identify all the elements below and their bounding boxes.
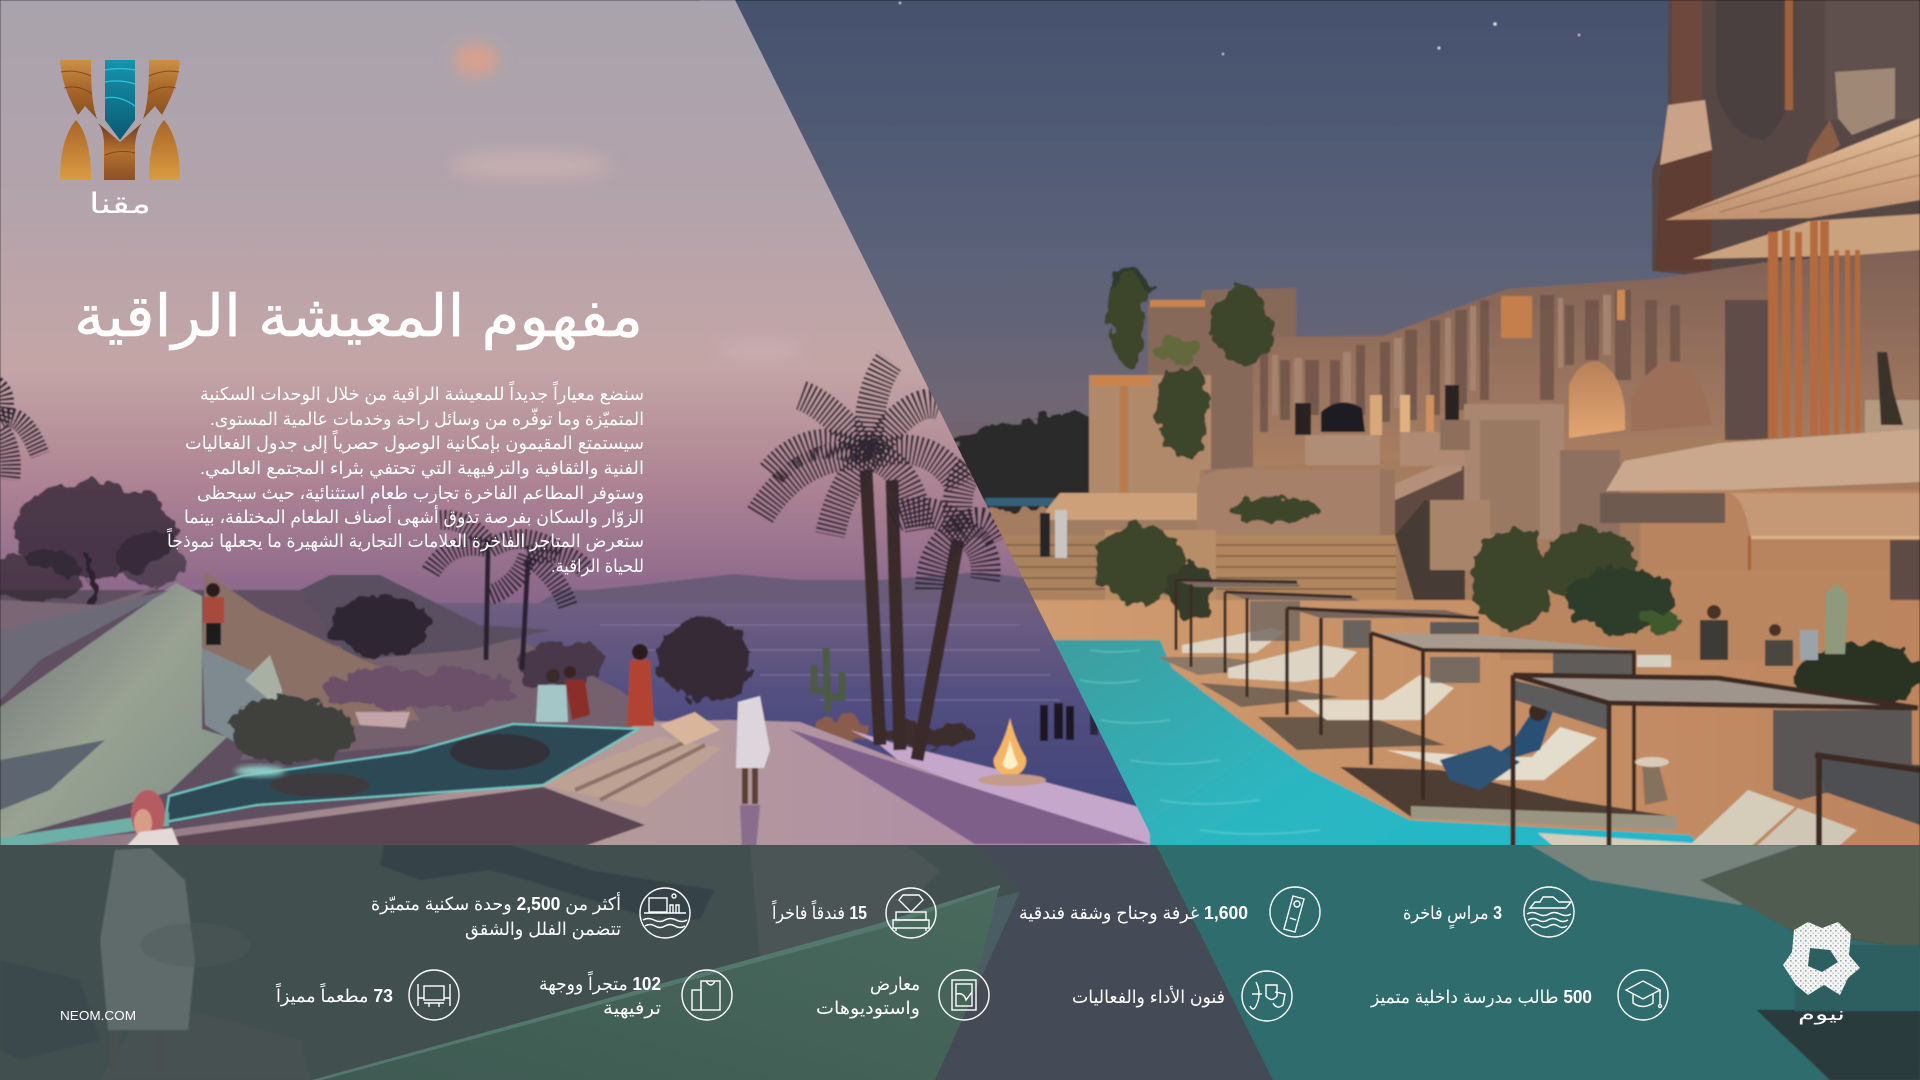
stat: marinas: 3 مراسٍ فاخرة	[1403, 903, 1502, 929]
sea	[438, 602, 1150, 834]
stat: shops: 102 متجراً ووجهة	[539, 971, 661, 995]
tree left	[0, 482, 186, 605]
stat: marinas	[1403, 887, 1574, 937]
stat: hotel rooms	[1019, 887, 1320, 937]
stat: restaurants: 73 مطعماً مميزاً	[275, 983, 393, 1007]
logo: Magna	[60, 60, 180, 219]
vines and plants	[1094, 268, 1920, 707]
body text: للحياة الراقية.	[551, 556, 644, 577]
bottom info band	[0, 845, 1920, 1080]
stat: galleries	[816, 970, 989, 1020]
icon: theatre masks	[1242, 971, 1292, 1021]
bathrobe figure	[736, 696, 770, 850]
icon: bed with diamond	[886, 888, 936, 938]
cactus	[814, 648, 842, 712]
seated women	[536, 666, 590, 722]
cabana 5	[1512, 675, 1920, 1060]
walking couple	[1040, 510, 1067, 558]
icon: shopping bags	[682, 970, 732, 1020]
neom mark	[1783, 922, 1860, 995]
stat: residential units: أكثر من 2,500 وحدة سكنية متميّزة	[371, 892, 621, 915]
stat: hotel rooms: 1,600 غرفة وجناح وشقة فندقية	[1019, 903, 1248, 924]
long facade	[1253, 250, 1920, 470]
balcony figure	[1865, 352, 1920, 434]
stat: performing arts: فنون الأداء والفعاليات	[1072, 986, 1225, 1008]
stairs	[1003, 500, 1490, 620]
left ground	[0, 589, 437, 837]
canopies	[1665, 118, 1920, 259]
body text: وستوفر المطاعم الفاخرة تجارب طعام استثنائية، حيث سيحظى	[197, 483, 644, 504]
band: cushions and shapes	[0, 845, 940, 1080]
stat: residential units	[371, 888, 690, 940]
band: pool water	[1156, 845, 1920, 1080]
bonfire	[978, 718, 1046, 786]
clouds	[449, 38, 603, 180]
icon: villa on water	[640, 888, 690, 938]
stat: restaurants	[275, 970, 459, 1020]
body text: سيستمتع المقيمون بإمكانية الوصول حصرياً إلى جدول الفعاليات	[185, 430, 644, 454]
icon: yacht on waves	[1524, 887, 1574, 937]
body text	[166, 381, 644, 577]
seated guests	[1700, 584, 1848, 666]
stars	[899, 2, 1580, 55]
icon: framed picture	[939, 970, 989, 1020]
title: مفهوم المعيشة الراقية	[74, 284, 643, 351]
band: chair and platform	[1530, 845, 1920, 1080]
foreground woman	[125, 790, 180, 848]
copper columns	[1768, 221, 1860, 439]
tall palms	[760, 360, 1000, 760]
stat: performing arts	[1072, 971, 1292, 1021]
logo: NEOM	[1783, 922, 1860, 1025]
stat: school: 500 طالب مدرسة داخلية متميز	[1370, 987, 1592, 1008]
stat: hotels: 15 فندقاً فاخراً	[771, 900, 867, 924]
curved awning	[1600, 429, 1920, 660]
logo word: مقنا	[89, 188, 151, 219]
neom word: نيوم	[1798, 1004, 1845, 1025]
poolside floor	[985, 600, 1920, 1080]
infinity pool	[0, 724, 638, 850]
stat: hotels	[771, 888, 936, 938]
icon: graduation cap	[1618, 970, 1668, 1020]
man in red	[203, 583, 224, 645]
cabana 3	[1258, 608, 1479, 750]
stat: shops: ترفيهية	[603, 998, 661, 1019]
cabana 6	[1815, 753, 1920, 940]
band: robed figure	[100, 848, 250, 1072]
stat: galleries: واستوديوهات	[816, 998, 920, 1019]
small palm left	[0, 385, 40, 480]
potted plant	[1637, 655, 1671, 667]
icon: dining table	[409, 970, 459, 1020]
lavender beach	[850, 730, 1151, 845]
middle palms	[430, 520, 586, 670]
website: NEOM.COM	[60, 1008, 136, 1023]
upper block with vines	[1089, 288, 1296, 495]
group by the fire	[1040, 703, 1098, 741]
cabana 4	[1340, 633, 1677, 830]
deck	[32, 719, 1149, 1002]
back cabana wall	[1500, 570, 1890, 660]
body text: ستعرض المتاجر الفاخرة العلامات التجارية الشهيرة ما يجعلها نموذجاً	[166, 528, 644, 552]
bushes	[227, 595, 976, 764]
band: submerged green pool	[312, 885, 1000, 1080]
stat: galleries: معارض	[870, 974, 920, 995]
island	[300, 575, 550, 660]
stat: residential units: تتضمن الفلل والشقق	[465, 919, 621, 940]
pool	[1040, 640, 1705, 1080]
stat: shops	[539, 970, 732, 1020]
red-dress woman	[627, 644, 654, 726]
tower	[1652, 0, 1920, 300]
distant trees	[940, 410, 1100, 510]
band: grey blue shadow wedge	[935, 845, 1273, 1080]
body text: المتميّزة وما توفّره من وسائل راحة وخدمات عالمية المستوى.	[210, 408, 644, 430]
hill behind pool	[240, 640, 665, 760]
band: left floor tone	[0, 845, 1020, 1080]
lounge blocks	[355, 712, 720, 745]
scene: left coast at sunset	[0, 0, 1151, 1002]
cabana 2	[1200, 592, 1360, 707]
body text: الزوّار والسكان بفرصة تذوق أشهى أصناف الطعام المختلفة، بينما	[184, 505, 644, 528]
side table	[1635, 757, 1669, 805]
rocks	[0, 572, 420, 840]
mid terraces	[1046, 404, 1920, 660]
scene: right resort at dusk	[700, 0, 1920, 1080]
icon: door hanger	[1270, 887, 1320, 937]
body text: الفنية والثقافية والترفيهية التي تحتفي بثراء المجتمع العالمي.	[200, 458, 644, 479]
mountains	[539, 572, 1040, 603]
logo mark	[60, 60, 180, 180]
stat: school	[1370, 970, 1668, 1020]
cabana 1	[1157, 580, 1300, 675]
body text: سنضع معياراً جديداً للمعيشة الراقية من خلال الوحدات السكنية	[200, 381, 644, 405]
